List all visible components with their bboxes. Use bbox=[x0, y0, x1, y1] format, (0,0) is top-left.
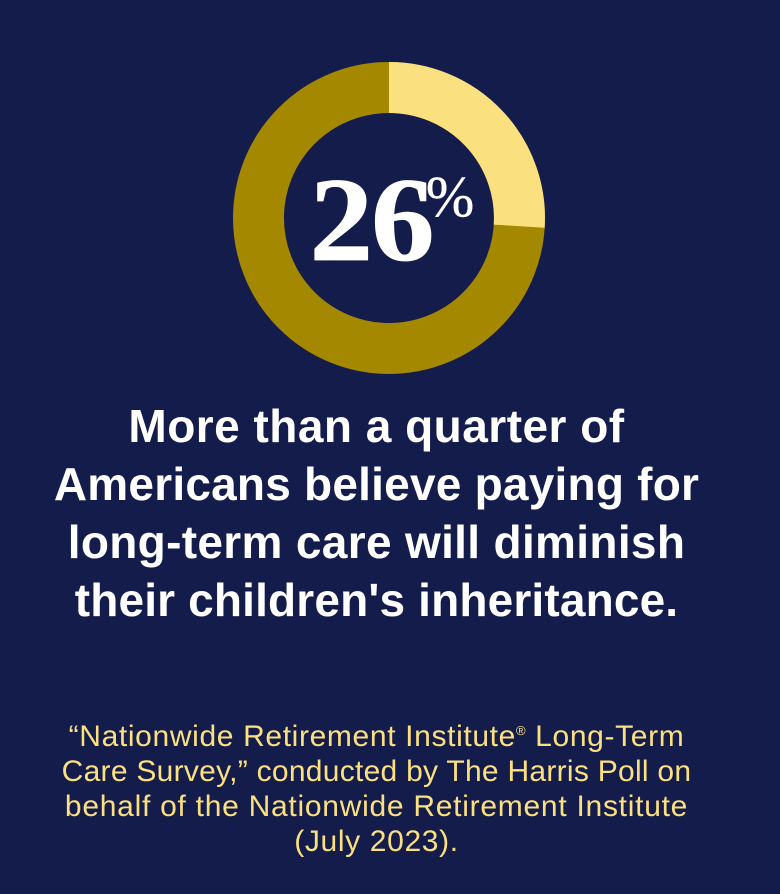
heading bbox=[54, 400, 699, 626]
heading: their children's inheritance. bbox=[75, 574, 678, 626]
donut track bbox=[258, 88, 520, 348]
source citation: behalf of the Nationwide Retirement Institute bbox=[65, 790, 688, 823]
big number: 26 bbox=[310, 153, 432, 286]
donut highlighted segment bbox=[389, 88, 519, 226]
source citation: Care Survey,” conducted by The Harris Poll on bbox=[62, 755, 691, 788]
source citation: “Nationwide Retirement Institute® Long-Term bbox=[69, 720, 684, 753]
donut chart: 26% bbox=[233, 62, 545, 374]
source citation bbox=[62, 720, 691, 858]
percent sign: % bbox=[426, 164, 474, 229]
heading: long-term care will diminish bbox=[68, 516, 685, 568]
heading: Americans believe paying for bbox=[54, 458, 699, 510]
heading: More than a quarter of bbox=[128, 400, 625, 452]
source citation: (July 2023). bbox=[294, 825, 459, 858]
